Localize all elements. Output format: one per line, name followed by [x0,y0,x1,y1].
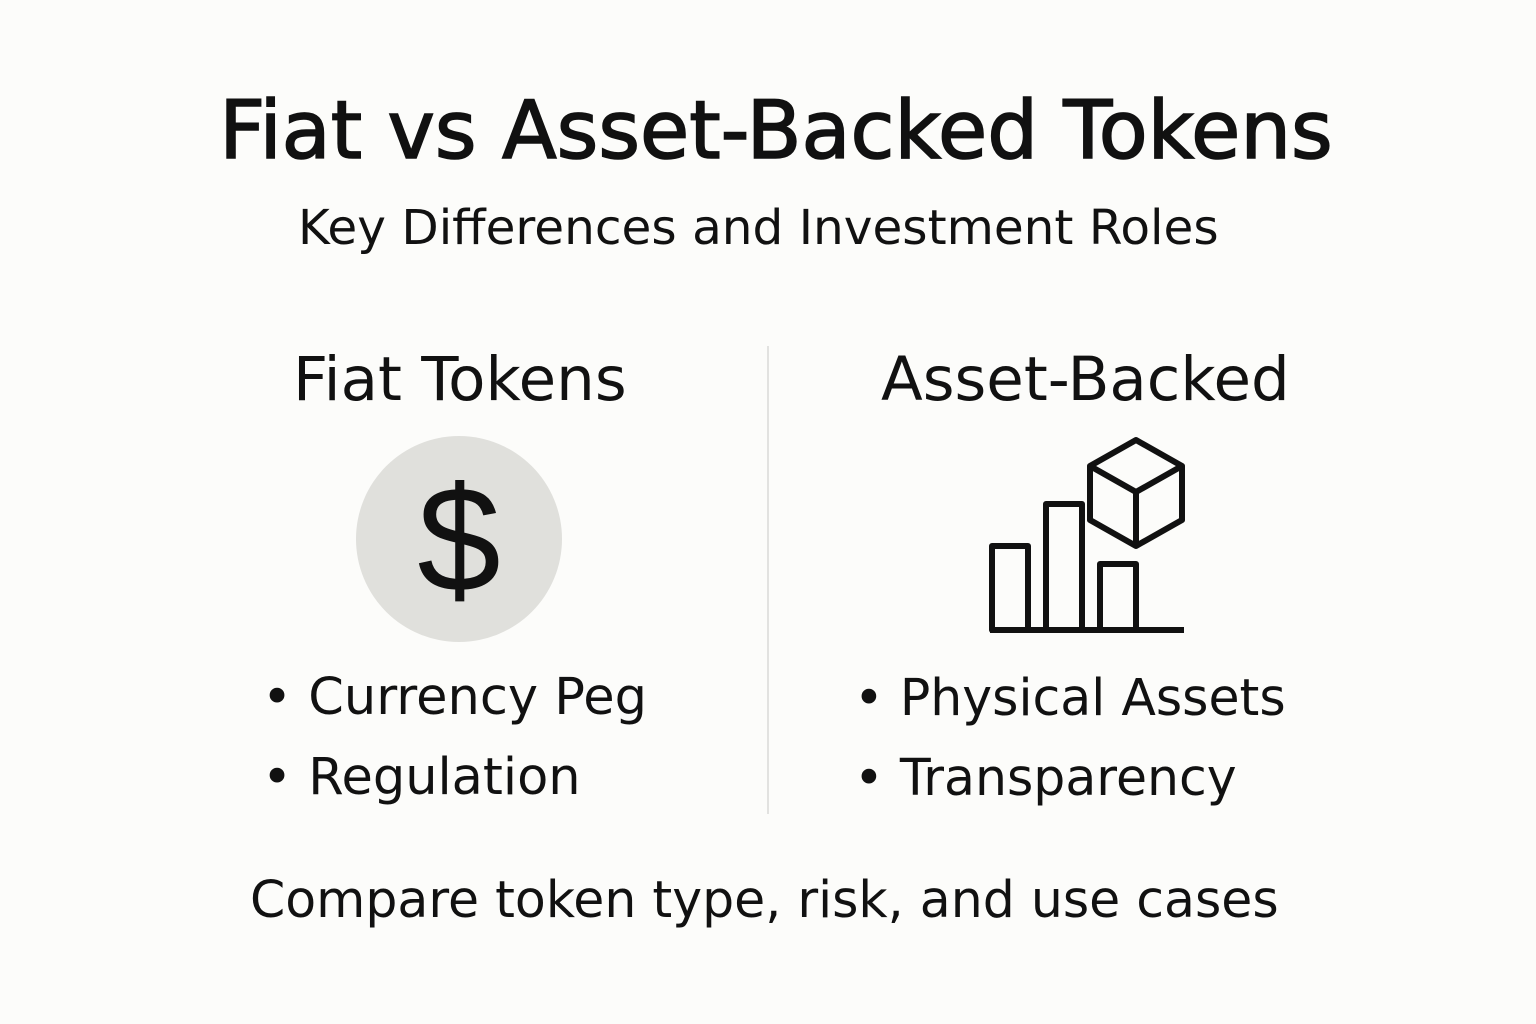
title: Fiat vs Asset-Backed Tokens [219,84,1333,177]
bullet list: asset-backed: • Physical Assets [854,668,1286,727]
icon: dollar circle [356,436,562,642]
bullet list: fiat: • Currency Peg [262,668,647,727]
heading: asset-backed: Asset-Backed [881,344,1290,415]
bullet list: fiat [262,668,647,807]
bullet list: asset-backed: • Transparency [854,748,1237,807]
subtitle: Key Differences and Investment Roles [298,200,1219,256]
icon: bar chart with cube [989,437,1185,633]
panel: fiat tokens [262,344,647,807]
divider [767,346,769,814]
icon: dollar circle: $ [417,455,501,623]
heading: fiat tokens: Fiat Tokens [293,344,627,415]
panel: asset-backed [854,344,1290,807]
bullet list: asset-backed [854,668,1286,807]
footer caption: Compare token type, risk, and use cases [250,870,1279,929]
bullet list: fiat: • Regulation [262,748,581,807]
